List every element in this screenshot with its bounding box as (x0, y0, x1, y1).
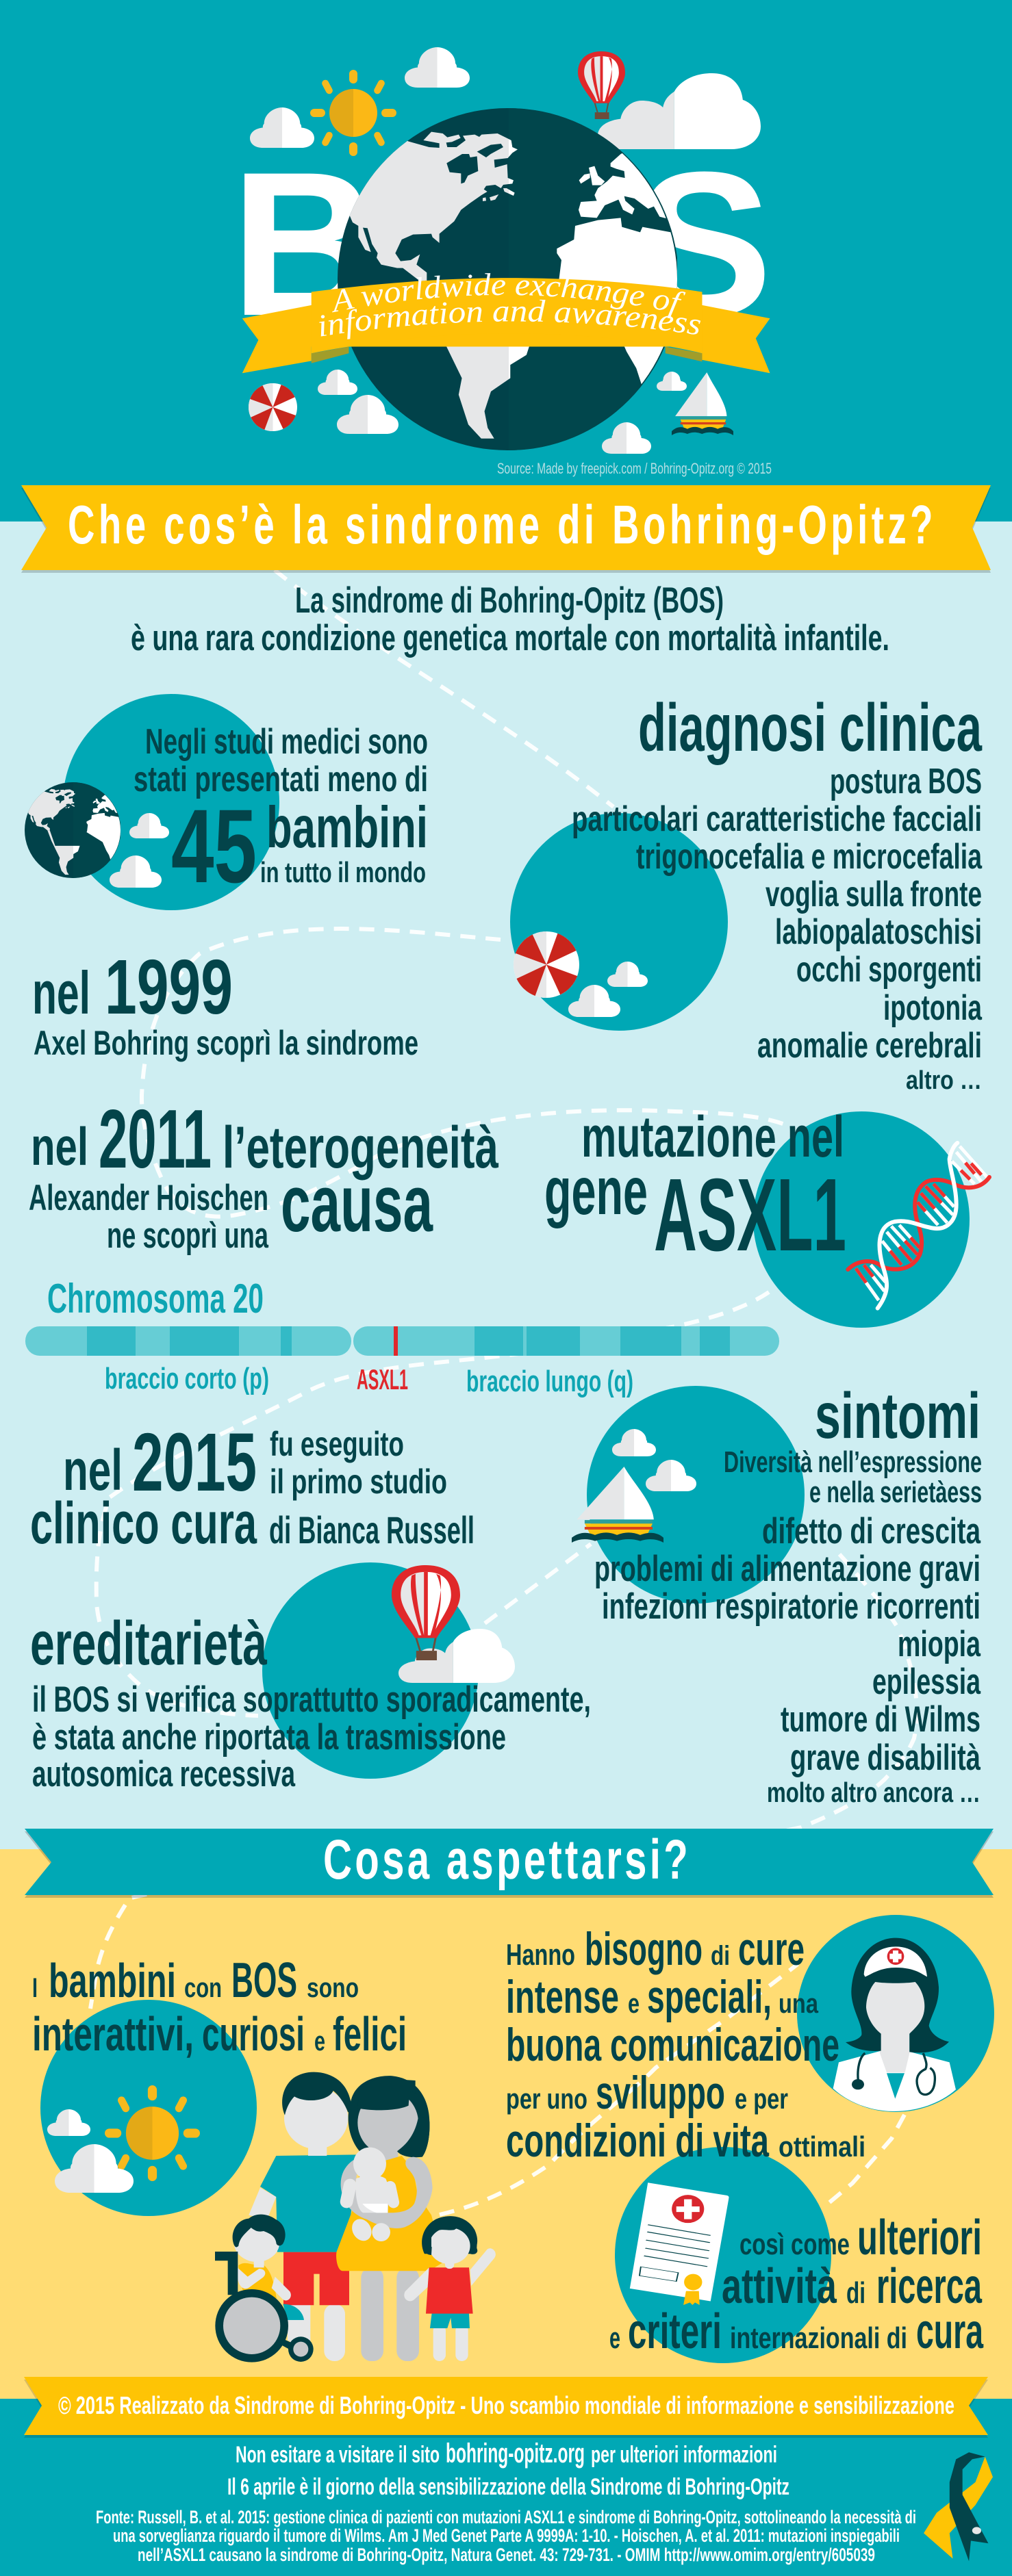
text: 1999: Axel Bohring scoprì la sindrome (34, 1024, 418, 1062)
text: 2011: Alexander Hoischen (29, 1178, 268, 1218)
text: 1999 (32, 944, 418, 1062)
icon: cloud left (250, 107, 314, 148)
chromosome labels: braccio lungo (q) (466, 1365, 633, 1398)
text: intensive care needs: buona comunicazione (506, 2019, 839, 2071)
circle: clinical diagnosis (510, 813, 728, 1031)
baby (339, 2148, 401, 2244)
text: children with BOS: BOS (231, 1953, 297, 2008)
text: fewer than 45 children (134, 722, 428, 905)
icon: clouds (568, 962, 648, 1017)
text: symptoms: miopia (898, 1624, 981, 1664)
text: heredity: autosomica recessiva (32, 1754, 295, 1794)
text: intensive care needs: Hanno (506, 1938, 575, 1972)
text: fewer than 45 children: stati presentati meno di (134, 760, 428, 799)
text: intensive care needs: di (711, 1941, 730, 1971)
text: heredity: ereditarietà (30, 1610, 268, 1678)
text: ASXL1 mutation (544, 1105, 846, 1272)
circle: fewer than 45 children (24, 694, 279, 910)
dashed connector lines (90, 570, 917, 2215)
big BOS lettering (231, 129, 772, 359)
text: 2011 (29, 1092, 499, 1256)
text: children with BOS: I (32, 1973, 38, 2003)
text: 2015 clinical study: fu eseguito (270, 1425, 404, 1463)
text: 2011: l’eterogeneità (223, 1115, 499, 1181)
icon: large cloud right (598, 73, 761, 149)
ribbon title: what to expect (25, 1829, 994, 1898)
text: intensive care needs: bisogno (585, 1923, 703, 1975)
text: 2015 clinical study: il primo studio (270, 1463, 447, 1501)
section background: header teal (0, 0, 1012, 521)
circle: heredity (262, 1562, 515, 1779)
intro text: La sindrome di Bohring-Opitz (BOS) (295, 580, 724, 621)
chromosome long arm (353, 1326, 779, 1356)
icon: sun (310, 70, 396, 156)
text: 2011: ne scoprì una (107, 1215, 268, 1256)
banner ribbon (242, 278, 770, 373)
icon: hot air balloon (392, 1565, 460, 1660)
text: children with BOS: e (314, 2026, 325, 2057)
icon: DNA helix (848, 1143, 989, 1309)
icon: beach umbrella (514, 931, 579, 998)
icon: sailboat (672, 372, 733, 435)
text: clinical diagnosis: altro … (906, 1066, 982, 1095)
circle: sun and clouds (40, 2000, 257, 2216)
big BOS lettering: S (635, 129, 772, 359)
icon: large cloud (399, 1629, 515, 1683)
chromosome labels: ASXL1 (357, 1363, 408, 1395)
text: further research: criteri (628, 2304, 722, 2359)
icon: nurse (833, 1938, 956, 2111)
text: heredity (30, 1610, 591, 1794)
footer text: Non esitare a visitare il sito (236, 2442, 440, 2468)
icon: clouds (612, 1429, 696, 1491)
circle: certificate (615, 2147, 831, 2363)
ribbon title: what to expect: Cosa aspettarsi? (323, 1829, 691, 1891)
text: fewer than 45 children: 45 (171, 788, 257, 905)
footer text: bohring-opitz.org (446, 2438, 585, 2469)
text: intensive care needs: una (779, 1989, 819, 2019)
icon: beach umbrella (249, 383, 297, 431)
text: ASXL1 mutation: ASXL1 (654, 1157, 846, 1272)
icon: sun (105, 2085, 200, 2181)
text: intensive care needs: intense (506, 1971, 619, 2023)
section background: footer teal (0, 2399, 1012, 2576)
chromosome title: Chromosoma 20 (47, 1276, 264, 1322)
text: 2011: nel (31, 1116, 88, 1176)
text: intensive care needs: sviluppo (596, 2067, 725, 2119)
text: further research: attività (722, 2259, 837, 2314)
text: 2015 clinical study: nel (63, 1438, 123, 1502)
text: fewer than 45 children: in tutto il mondo (260, 856, 426, 888)
icon: sailboat (572, 1467, 663, 1543)
mother (336, 2076, 444, 2361)
text: intensive care needs (506, 1923, 865, 2167)
text: 2015 clinical study: 2015 (132, 1415, 257, 1508)
icon: cloud top (405, 47, 470, 88)
circle: ASXL1 gene with DNA (753, 1111, 989, 1328)
chromosome short arm (25, 1326, 351, 1356)
text: further research: internazionali di (730, 2321, 907, 2355)
circle: nurse (797, 1915, 994, 2112)
banner text: A worldwide exchange of (332, 273, 686, 319)
text: children with BOS: interattivi, (32, 2007, 194, 2061)
text: intensive care needs: cure (738, 1923, 805, 1975)
banner text: information and awareness (319, 300, 701, 339)
chromosome 20 diagram (25, 1276, 779, 1398)
text: children with BOS: bambini (49, 1954, 176, 2007)
icon: clouds (110, 813, 169, 888)
text: fewer than 45 children: bambini (266, 795, 428, 860)
text: children with BOS: felici (333, 2007, 407, 2061)
banner text (319, 273, 701, 339)
text: symptoms (594, 1380, 982, 1808)
child with wheelchair (215, 2215, 314, 2362)
section background: yellow (0, 1849, 1012, 2399)
text: 2015 clinical study: di Bianca Russell (269, 1508, 475, 1551)
icon: hot air balloon (578, 51, 625, 119)
child waving (404, 2216, 496, 2361)
text: 1999: 1999 (105, 944, 233, 1030)
icon: clouds (47, 2109, 134, 2193)
illustration: family (215, 2072, 496, 2362)
circle: symptoms (572, 1386, 805, 1603)
text: 2011: causa (281, 1159, 433, 1249)
footer text: per ulteriori informazioni (591, 2442, 777, 2468)
chromosome labels (105, 1362, 633, 1398)
icon: awareness ribbon (924, 2452, 993, 2561)
text: 2011: 2011 (99, 1092, 212, 1185)
text: fewer than 45 children: Negli studi medici sono (145, 722, 428, 762)
big BOS lettering: B (231, 129, 379, 359)
text: ASXL1 mutation: gene (544, 1153, 648, 1228)
text: further research (609, 2211, 984, 2359)
father (249, 2072, 357, 2361)
chromosome labels: braccio corto (p) (105, 1362, 269, 1395)
text: children with BOS (32, 1953, 407, 2061)
text: intensive care needs: e (628, 1989, 640, 2019)
text: further research: di (846, 2276, 865, 2310)
icon: small globe (24, 782, 127, 878)
text: intensive care needs: condizioni di vita (506, 2115, 770, 2167)
text: intensive care needs: e per (735, 2083, 788, 2115)
text: heredity: il BOS si verifica soprattutto sporadicamente, (32, 1679, 591, 1720)
text: further research: e (609, 2321, 620, 2355)
ribbon title: what is BOS (21, 485, 991, 573)
text: intensive care needs: ottimali (779, 2130, 865, 2163)
footer text (227, 2438, 789, 2500)
icon: small clouds lower (318, 370, 687, 454)
text: children with BOS: con (184, 1973, 222, 2003)
source note: Source: Made by freepick.com / Bohring-Opitz.org © 2015 (497, 460, 772, 477)
text: heredity: è stata anche riportata la trasmissione (32, 1717, 506, 1757)
text: children with BOS: curiosi (202, 2007, 305, 2061)
text: 2015 clinical study (30, 1415, 475, 1556)
text: intensive care needs: speciali, (647, 1971, 772, 2023)
text: further research: così come (739, 2228, 850, 2261)
text: children with BOS: sono (307, 1973, 359, 2003)
header illustration (231, 47, 772, 477)
text: 1999: nel (32, 959, 90, 1027)
text: ASXL1 mutation: mutazione nel (581, 1105, 844, 1169)
text: clinical diagnosis (572, 690, 983, 1095)
icon: globe (336, 108, 700, 450)
ribbon: copyright (24, 2377, 988, 2438)
section background: light blue (0, 521, 1012, 1849)
intro text (131, 580, 889, 658)
icon: medical certificate (630, 2182, 729, 2305)
text: intensive care needs: per uno (506, 2083, 587, 2115)
footer sources (96, 2507, 916, 2565)
text: 2015 clinical study: clinico cura (30, 1491, 257, 1556)
